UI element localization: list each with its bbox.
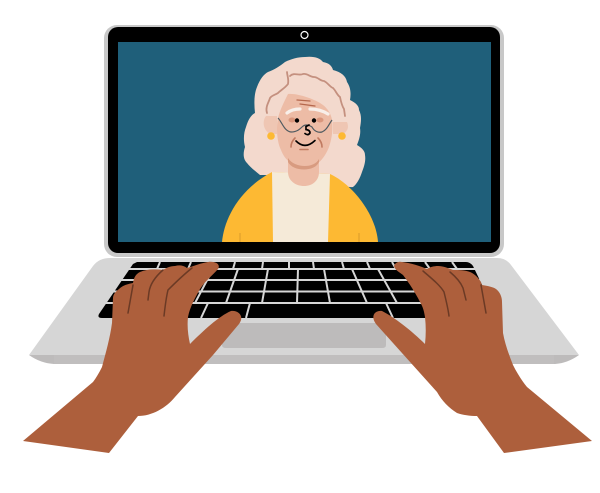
hair [244,57,365,187]
earrings [267,132,275,140]
smile lines and lower lip [291,138,322,150]
finger creases [423,271,486,316]
neck [288,152,319,186]
face [277,94,332,168]
eyebrows [287,109,328,114]
ears [264,116,348,134]
forehead wrinkles [297,100,315,106]
mouth [296,140,315,145]
right hand [373,262,592,453]
trackpad [222,323,386,348]
cardigan fold lines [240,233,359,242]
body: yellow cardigan [222,172,378,242]
hair strands [266,72,345,116]
keyboard [95,262,505,318]
neck shadow [288,158,319,170]
cream top [272,172,330,242]
laptop lid [104,25,504,257]
nose [305,125,310,135]
laptop base [29,258,579,364]
finger creases [128,268,192,316]
woman on screen [222,57,378,242]
glasses [278,118,332,132]
cheeks [288,118,296,122]
left hand [23,262,241,453]
screen [118,42,491,242]
eyes [295,118,299,123]
webcam [301,32,308,38]
